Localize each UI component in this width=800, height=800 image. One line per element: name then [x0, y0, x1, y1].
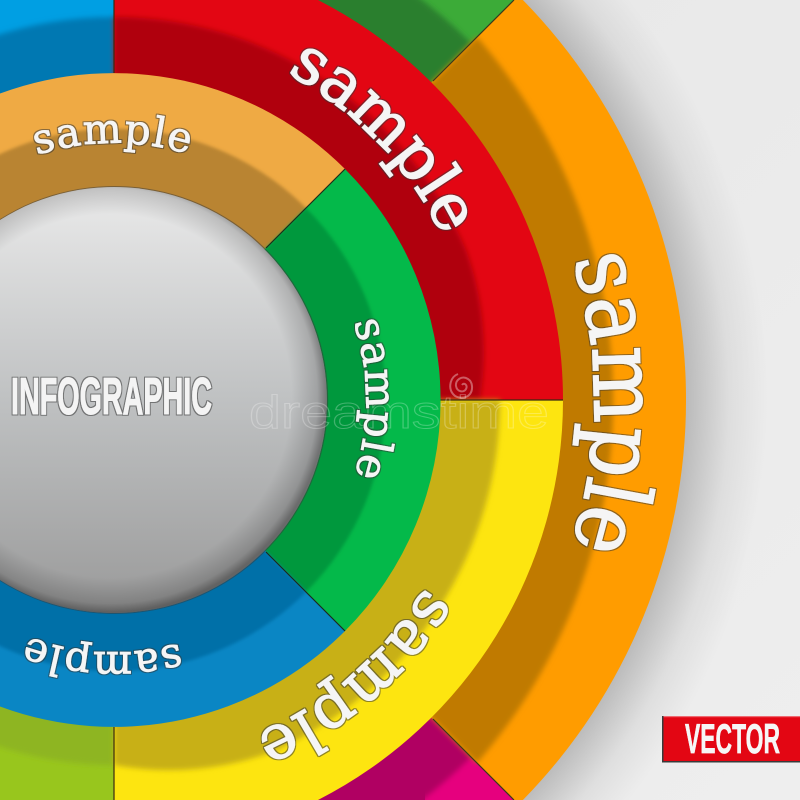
segment: orange [114, 0, 686, 800]
segment: yellow [114, 0, 563, 800]
label: blue segment: sample [24, 638, 182, 679]
segment: blue [0, 169, 345, 727]
label: yellow segment: sample [260, 589, 449, 760]
panel: inner ring [0, 73, 441, 727]
label: green segment: sample [354, 318, 396, 478]
segment: red [114, 0, 563, 400]
segment: dark green [114, 0, 514, 400]
segment: green [114, 169, 441, 631]
segment: blue top left [0, 0, 114, 400]
title: infographic: INFOGRAPHIC [11, 368, 212, 426]
segment: lime bottom left [0, 400, 114, 800]
center disc [0, 186, 328, 614]
watermark: dreamstime [249, 386, 549, 438]
watermark [249, 374, 549, 438]
segment: tan orange [0, 73, 345, 400]
panel: middle ring [0, 0, 563, 800]
label: red segment: sample [289, 48, 468, 231]
segment: magenta [114, 400, 514, 800]
label: orange segment: sample [571, 253, 657, 552]
panel: outer ring [114, 0, 686, 800]
label: tan segment: sample [33, 114, 191, 155]
